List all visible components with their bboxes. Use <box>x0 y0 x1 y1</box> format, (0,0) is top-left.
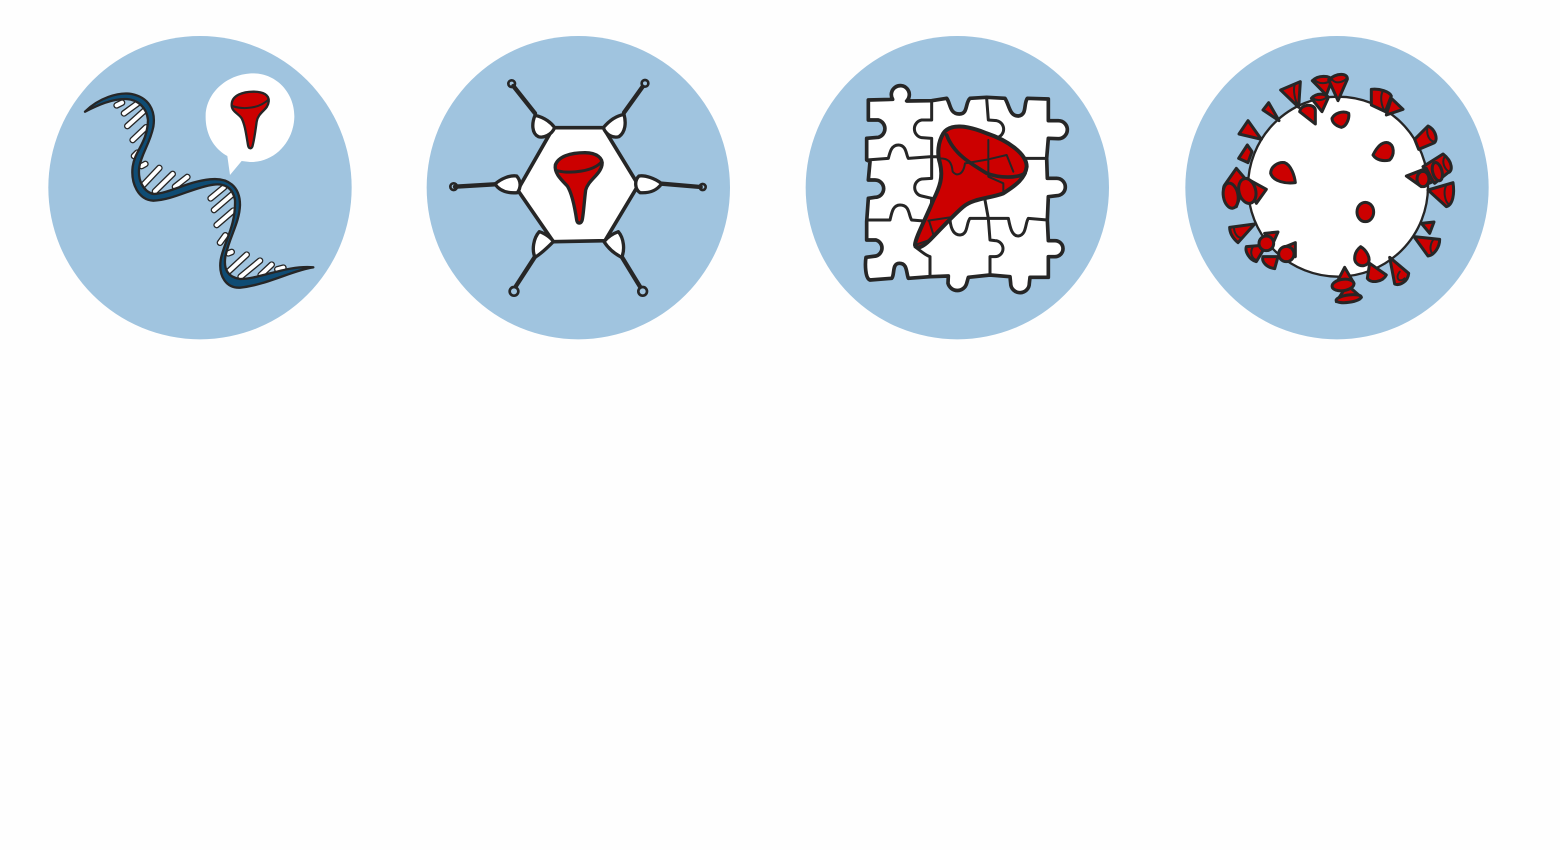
icon: puzzle with funnel <box>806 36 1109 339</box>
arm end rings <box>450 80 706 296</box>
icon: hexagon cell with funnel <box>427 36 730 339</box>
speech bubble <box>206 73 294 175</box>
background circle: puzzle <box>806 36 1109 339</box>
puzzle inner joins <box>867 98 1047 277</box>
DNA ribbon <box>85 94 313 288</box>
DNA base pair rungs <box>117 102 283 277</box>
hexagon arms <box>455 86 701 287</box>
virus spike rims <box>1234 77 1450 280</box>
icon: virus with spikes <box>1185 36 1489 339</box>
icon: DNA strand with speech bubble containing funnel <box>48 36 352 339</box>
virus inner spots <box>1271 112 1393 266</box>
icon: large red funnel over puzzle <box>915 126 1027 247</box>
icon: red funnel in hexagon <box>555 153 602 223</box>
hexagon body <box>518 128 638 242</box>
puzzle outline <box>865 86 1067 293</box>
background circle: DNA <box>48 36 352 339</box>
virus spikes <box>1221 74 1454 304</box>
virus body <box>1248 97 1428 277</box>
hexagon vertex nodes <box>495 114 662 257</box>
background circle: virus <box>1185 36 1489 339</box>
icon: red funnel in bubble <box>232 92 269 148</box>
background circle: hexagon <box>427 36 730 339</box>
